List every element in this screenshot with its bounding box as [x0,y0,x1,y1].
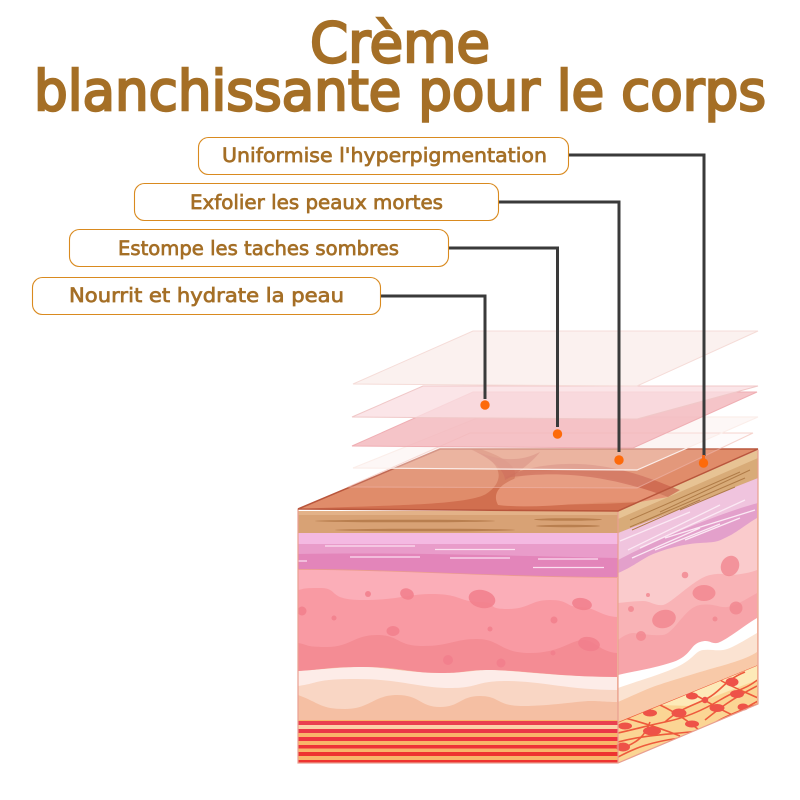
label: Exfolier les peaux mortes [134,184,498,220]
sheet 3 [352,392,757,448]
label: Estompe les taches sombres: Estompe les taches sombres [118,237,399,260]
sheet 2 [352,386,758,419]
hypodermis / pink band [298,533,618,577]
sheet 5 [348,433,753,488]
side face layers [298,450,760,763]
skin cross-section block [298,449,760,764]
floating translucent skin sheets [348,331,758,488]
top skin surface [298,449,758,511]
title [34,11,766,123]
label: Uniformise l'hyperpigmentation [198,138,568,174]
title: blanchissante pour le corps [34,59,766,123]
connector 1: Uniformise [569,155,708,468]
label: Estompe les taches sombres [70,230,448,266]
dermis [298,569,617,677]
sheet 4 [353,417,758,470]
connector 4: Nourrit [381,296,490,410]
sheet 1 [353,331,758,386]
connector 2: Exfolier [499,202,624,465]
epidermis tan band [298,511,618,533]
side tan band [618,450,758,533]
dermis cells [298,586,601,668]
muscle stripes [298,720,618,764]
side pink band [618,450,757,573]
label: Exfolier les peaux mortes: Exfolier les peaux mortes [190,191,443,214]
fat layer [298,667,617,720]
label: Uniformise l'hyperpigmentation: Uniformise l'hyperpigmentation [222,144,547,167]
label: Nourrit et hydrate la peau: Nourrit et hydrate la peau [69,284,344,307]
fat cells and network [616,665,760,763]
title: Crème [310,11,490,75]
side fat [618,450,758,722]
side dermis [618,450,757,675]
front face layers [298,511,618,764]
label: Nourrit et hydrate la peau [32,278,380,314]
connector 3: Estompe [449,248,562,439]
